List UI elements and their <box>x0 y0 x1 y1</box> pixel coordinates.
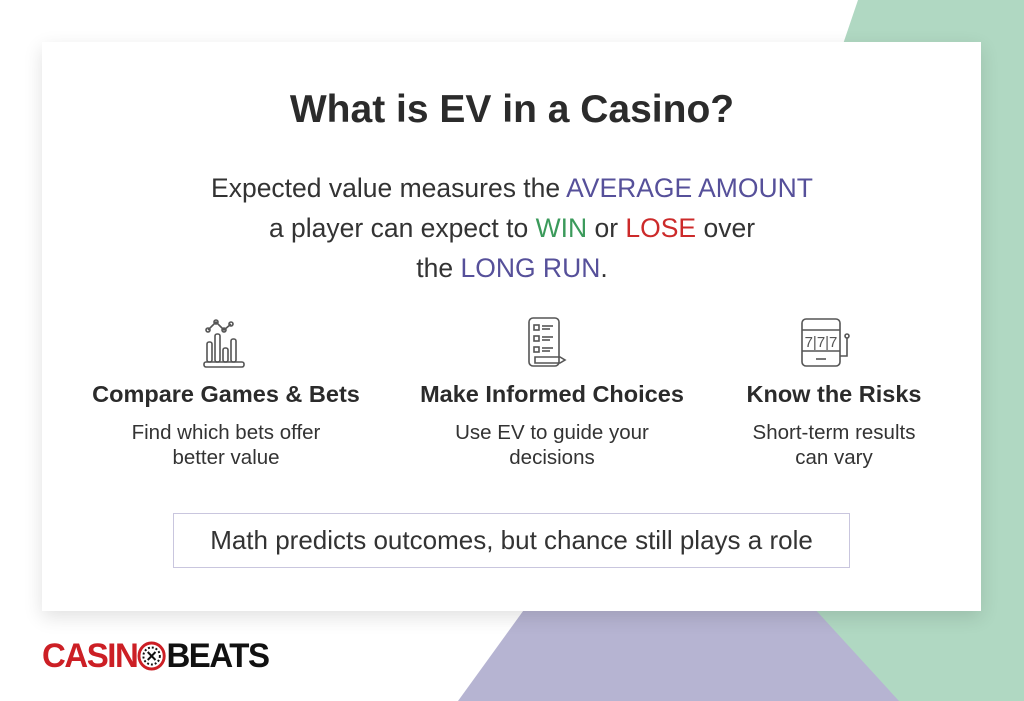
card <box>42 42 981 611</box>
column: risks: Know the Risks <box>746 381 921 407</box>
lead text <box>211 173 813 283</box>
callout <box>173 513 850 568</box>
column: risks: Short-term results <box>753 421 915 444</box>
column: informed: Make Informed Choices <box>420 381 684 407</box>
lead text: Expected value measures the AVERAGE AMOUNT <box>211 173 813 203</box>
column: compare: Compare Games & Bets <box>92 381 360 407</box>
icon: bar chart <box>203 319 245 368</box>
column: informed: Use EV to guide your <box>455 421 649 444</box>
lead text: a player can expect to WIN or LOSE over <box>269 213 755 243</box>
icon: slot machine: 7|7|7 <box>805 334 837 351</box>
callout: Math predicts outcomes, but chance still plays a role <box>210 525 813 555</box>
icon: slot machine <box>801 318 850 367</box>
column: compare: Find which bets offer <box>132 421 320 444</box>
lead text: the LONG RUN. <box>416 253 608 283</box>
logo: CASIN BEATS <box>42 637 269 675</box>
column: compare <box>92 381 360 469</box>
icon: checklist <box>528 317 566 367</box>
column: risks: can vary <box>795 446 873 469</box>
column: informed <box>420 381 684 469</box>
column: risks <box>746 381 921 469</box>
column: compare: better value <box>172 446 280 469</box>
title: What is EV in a Casino? <box>290 88 734 131</box>
column: informed: decisions <box>509 446 595 469</box>
